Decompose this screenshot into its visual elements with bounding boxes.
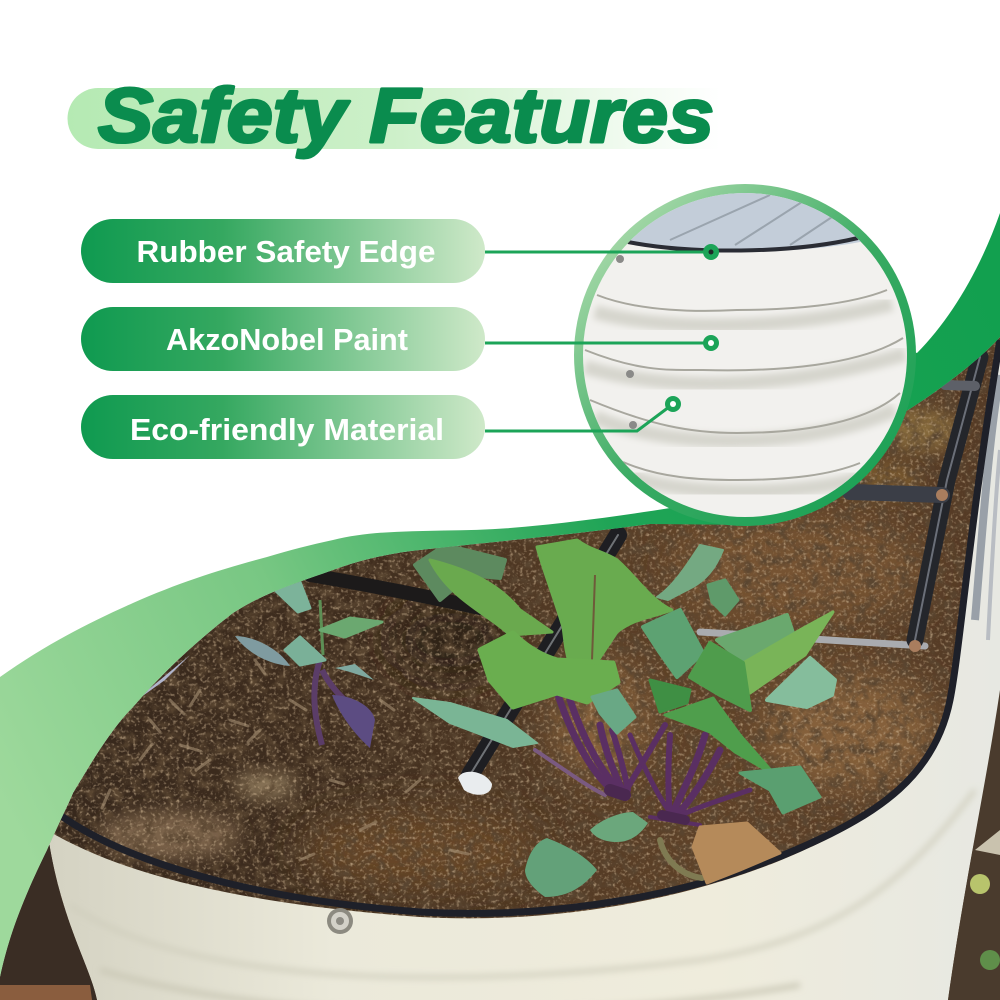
leaf far lower right	[740, 767, 820, 813]
bed wall	[47, 345, 1000, 1000]
rubber edge detail	[628, 238, 858, 251]
soil	[0, 330, 1000, 1000]
leaf upper right	[717, 615, 793, 665]
rivets	[616, 255, 637, 429]
callout: rubber safety edge: Rubber Safety Edge	[136, 234, 436, 269]
small plant	[130, 582, 382, 748]
stems	[535, 695, 750, 878]
leaf large top	[537, 540, 672, 665]
connector: rubber edge	[485, 244, 719, 260]
outside ground left	[0, 835, 97, 1000]
leaf thin left	[413, 698, 537, 747]
garden bed photo	[0, 330, 1000, 1000]
bed screw	[327, 908, 353, 934]
leaf arch right	[665, 698, 775, 775]
leaf bottom small	[590, 812, 648, 842]
background plant	[415, 545, 505, 600]
leaf front	[480, 633, 618, 707]
leaf small back	[708, 580, 738, 615]
leaf bright right	[743, 612, 833, 693]
connector: material	[485, 396, 681, 431]
midrib top leaf	[592, 575, 595, 660]
green wave band	[0, 213, 1000, 977]
callout: eco-friendly material	[81, 395, 485, 459]
outside ground bottom left	[0, 985, 92, 1000]
rib lines	[585, 290, 905, 491]
main plant	[413, 540, 835, 897]
leaf pale right	[767, 658, 835, 707]
title highlight	[67, 88, 720, 149]
leaf bottom large	[525, 838, 597, 897]
leaf blue centre	[643, 610, 703, 677]
magnified circle detail	[574, 180, 916, 526]
callout: akzonobel paint	[81, 307, 485, 371]
callout: eco-friendly material: Eco-friendly Material	[130, 412, 444, 447]
callout: akzonobel paint: AkzoNobel Paint	[166, 322, 408, 357]
connector: paint	[485, 335, 719, 351]
outside ground right	[948, 690, 1000, 1000]
callout: rubber safety edge	[81, 219, 485, 283]
irrigation end cap	[458, 772, 492, 795]
rubber safety edge	[60, 340, 1000, 913]
metal top	[630, 193, 861, 250]
dried leaf	[693, 823, 780, 883]
leaf lower centre	[592, 690, 635, 733]
title: Safety Features	[98, 73, 714, 159]
leaf back top	[657, 545, 723, 600]
leaf inner	[650, 680, 690, 712]
leaf mid right	[690, 643, 750, 710]
leaf left	[430, 560, 552, 635]
irrigation pipes	[310, 357, 980, 775]
